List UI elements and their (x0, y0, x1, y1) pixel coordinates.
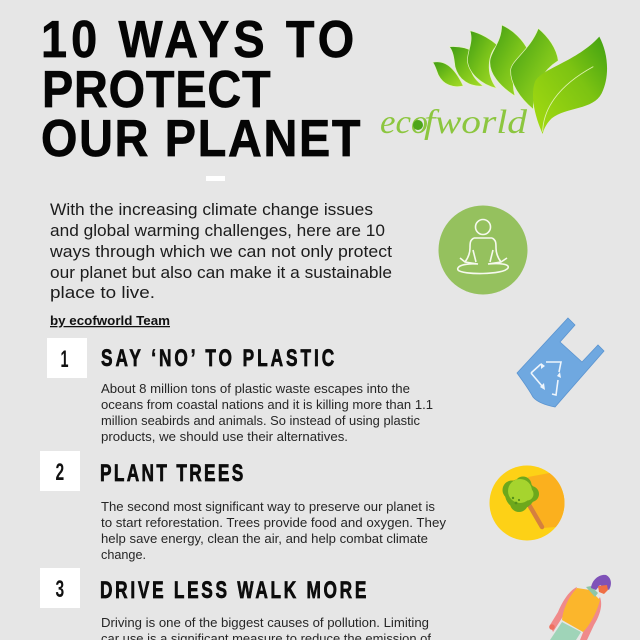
intro paragraph: our planet but also can make it a sustainable (50, 264, 392, 282)
intro paragraph: ways through which we can not only protect (49, 243, 392, 261)
logo: ecofworld (380, 25, 607, 141)
icon: walking person (549, 575, 611, 640)
title: 10 WAYS TO (41, 11, 354, 69)
number box 3: 3 (56, 577, 64, 603)
title (41, 11, 361, 168)
logo globe (413, 120, 423, 130)
icon: plastic bag (517, 318, 604, 407)
number box 2 (40, 451, 80, 491)
step 1 (47, 338, 433, 444)
intro paragraph: With the increasing climate change issues (50, 201, 373, 219)
intro paragraph (49, 201, 392, 302)
intro paragraph: and global warming challenges, here are 10 (50, 222, 385, 240)
step 3 (40, 568, 431, 640)
icon: tree (490, 466, 564, 540)
step 2 (40, 451, 447, 562)
body 2: The second most significant way to preserve our planet is (101, 499, 435, 514)
intro paragraph: place to live. (50, 284, 155, 302)
body 3 (101, 615, 431, 640)
heading 1: SAY ‘NO’ TO PLASTIC (101, 345, 334, 372)
body 1: products, we should use their alternatives. (101, 429, 348, 444)
logo large leaf (533, 37, 607, 134)
byline: by ecofworld Team (50, 314, 170, 328)
logo leaves (433, 25, 558, 109)
body 2: help save energy, clean the air, and help combat climate (101, 531, 428, 546)
body 1: million seabirds and animals. So instead of using plastic (101, 413, 420, 428)
body 3: Driving is one of the biggest causes of pollution. Limiting (101, 615, 429, 630)
body 1: About 8 million tons of plastic waste escapes into the (101, 381, 410, 396)
body 2 (101, 499, 447, 562)
number box 3 (40, 568, 80, 608)
logo wordmark: fworld (424, 104, 528, 141)
body 1 (101, 381, 433, 444)
body 2: to start reforestation. Trees provide food and oxygen. They (101, 515, 447, 530)
logo wordmark: o (411, 104, 428, 141)
body 2: change. (101, 547, 146, 562)
heading 3: DRIVE LESS WALK MORE (100, 577, 366, 604)
body 1: oceans from coastal nations and it is killing more than 1.1 (101, 397, 433, 412)
number box 1: 1 (60, 346, 69, 373)
number box 2: 2 (56, 460, 64, 486)
title: OUR PLANET (41, 110, 361, 168)
icon: meditation (438, 206, 528, 294)
title: PROTECT (42, 61, 271, 119)
logo wordmark: ec (380, 104, 411, 141)
logo wordmark (380, 104, 528, 141)
heading 2: PLANT TREES (100, 460, 243, 487)
divider dash (206, 176, 225, 181)
number box 1 (47, 338, 87, 378)
